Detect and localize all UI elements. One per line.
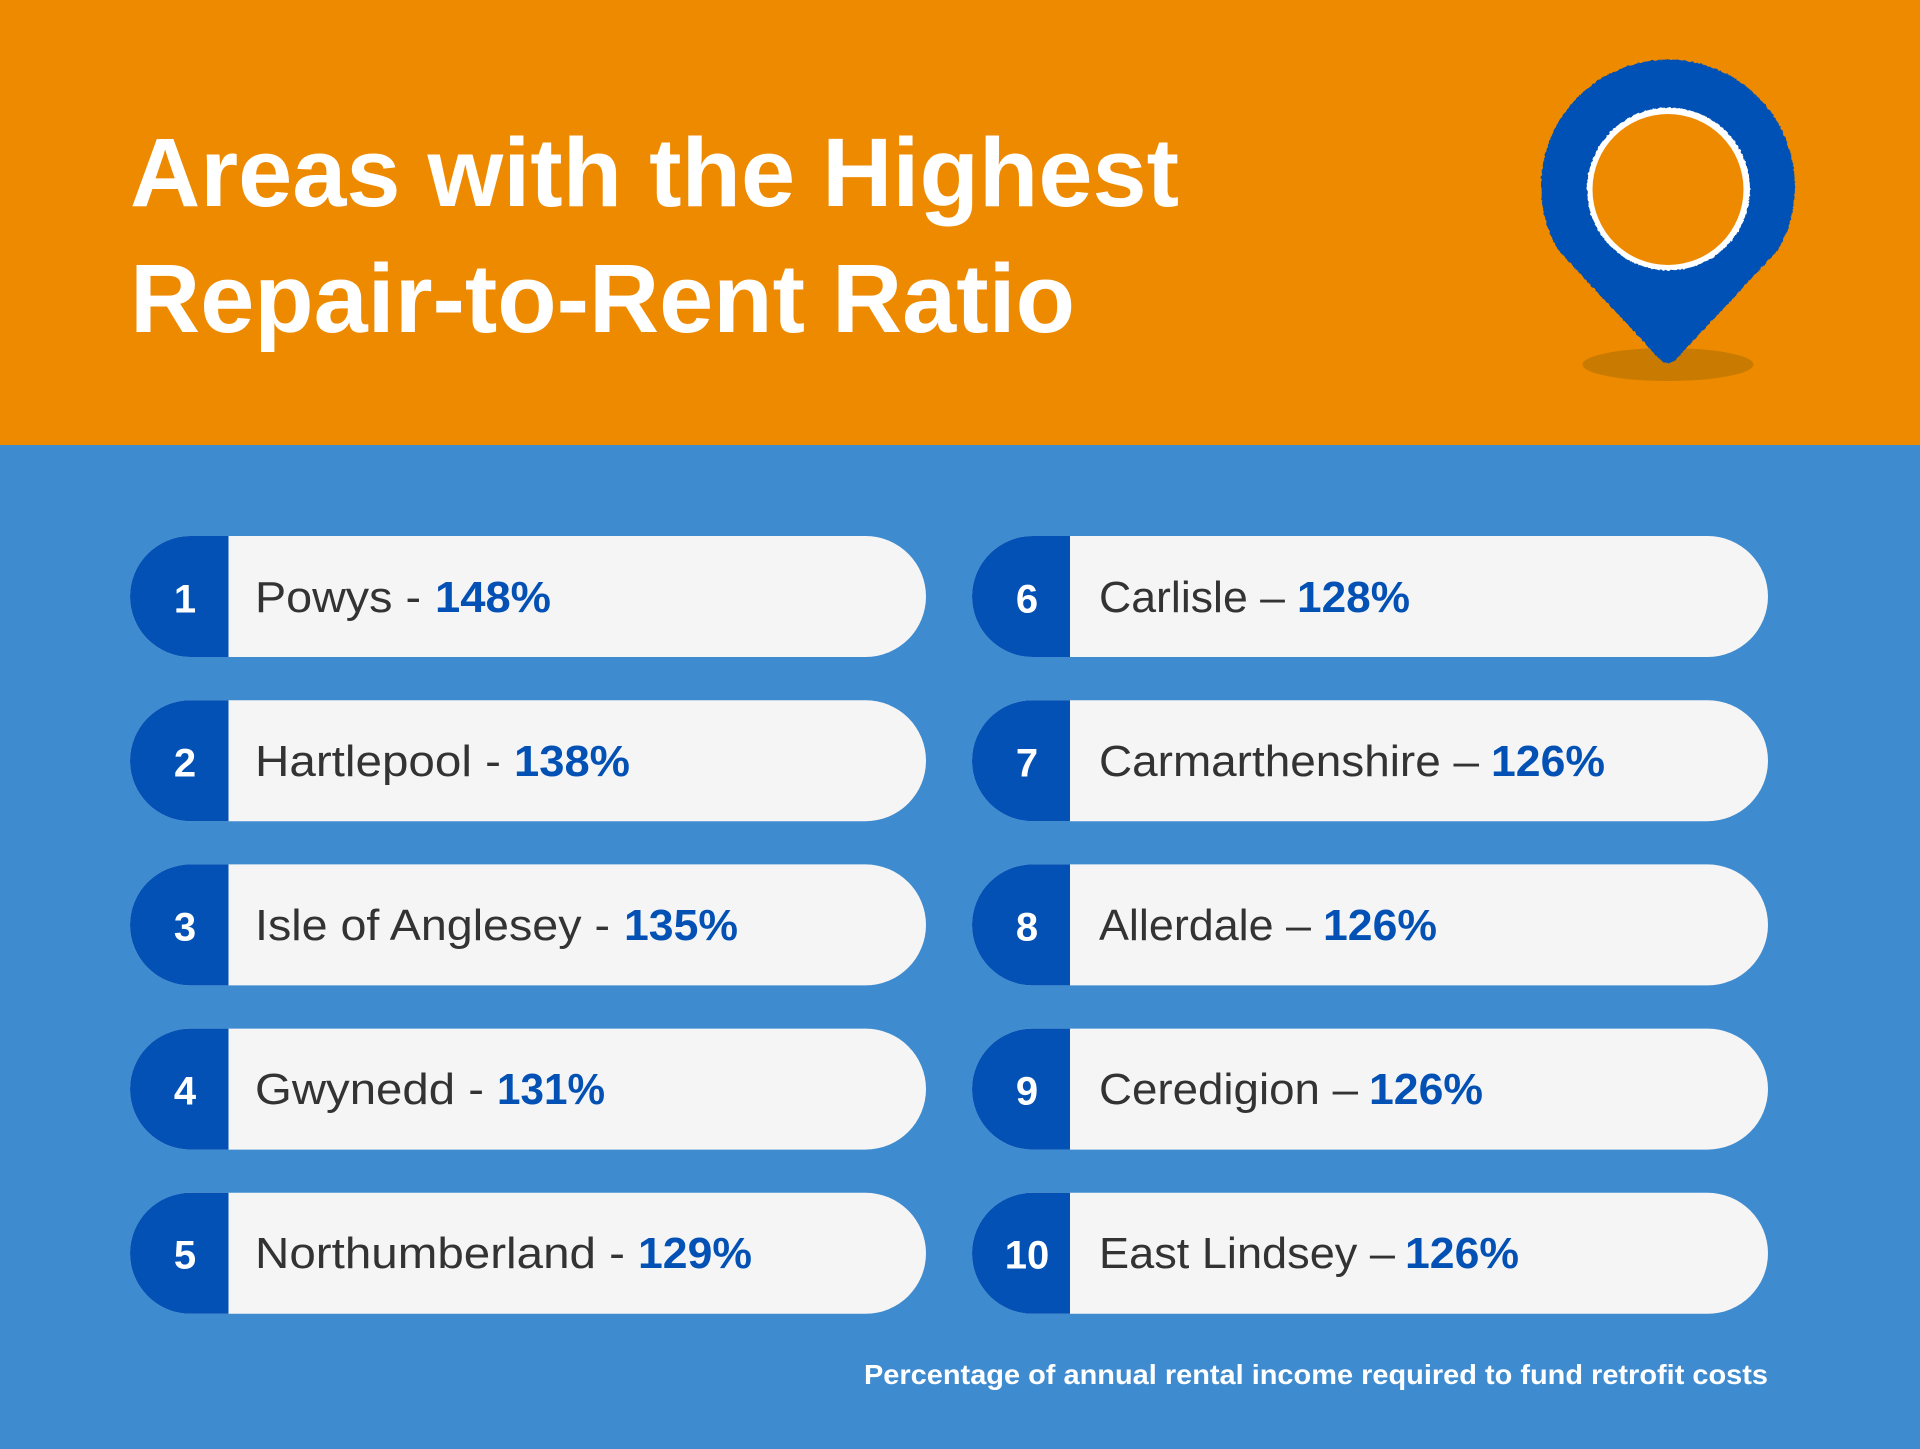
row 3: Isle of Anglesey: 3 [174, 906, 196, 950]
row 1: Powys [130, 536, 926, 657]
row 1: Powys: 1 [174, 578, 196, 622]
row 6: Carlisle: 128% [1297, 573, 1410, 622]
row 4: Gwynedd: Gwynedd - [255, 1065, 484, 1114]
row 10: East Lindsey: East Lindsey – [1099, 1229, 1396, 1278]
row 9: Ceredigion: 126% [1369, 1065, 1483, 1114]
row 2: Hartlepool: Hartlepool - [255, 737, 501, 786]
row 10: East Lindsey: 126% [1405, 1229, 1519, 1278]
title: Areas with the Highest [130, 118, 1179, 227]
row 10: East Lindsey: 10 [1005, 1234, 1049, 1278]
row 6: Carlisle [972, 536, 1768, 657]
row 4: Gwynedd: 4 [174, 1070, 197, 1114]
panel: header band [0, 0, 1920, 445]
row 3: Isle of Anglesey: Isle of Anglesey - [255, 901, 610, 950]
row 5: Northumberland [130, 1193, 926, 1314]
row 9: Ceredigion: Ceredigion – [1099, 1065, 1359, 1114]
row 7: Carmarthenshire: 7 [1016, 742, 1038, 786]
row 2: Hartlepool [130, 700, 926, 821]
row 6: Carlisle: 6 [1016, 578, 1038, 622]
row 5: Northumberland: 5 [174, 1234, 196, 1278]
row 6: Carlisle: Carlisle – [1099, 573, 1286, 622]
footnote: Percentage of annual rental income required to fund retrofit costs [864, 1359, 1768, 1390]
row 8: Allerdale: 8 [1016, 906, 1038, 950]
row 9: Ceredigion: 9 [1016, 1070, 1038, 1114]
icon: location pin [1541, 60, 1795, 381]
row 9: Ceredigion [972, 1029, 1768, 1150]
panel: list background [0, 444, 1920, 1449]
row 3: Isle of Anglesey: 135% [624, 901, 738, 950]
row 5: Northumberland: 129% [638, 1229, 752, 1278]
row 8: Allerdale: 126% [1323, 901, 1437, 950]
row 7: Carmarthenshire: 126% [1491, 737, 1605, 786]
row 4: Gwynedd: 131% [497, 1065, 605, 1114]
row 10: East Lindsey [972, 1193, 1768, 1314]
row 8: Allerdale: Allerdale – [1099, 901, 1312, 950]
row 2: Hartlepool: 2 [174, 742, 196, 786]
row 5: Northumberland: Northumberland - [255, 1229, 625, 1278]
row 1: Powys: Powys - [255, 573, 421, 622]
row 4: Gwynedd [130, 1029, 926, 1150]
title [130, 118, 1179, 353]
row 3: Isle of Anglesey [130, 864, 926, 985]
title: Repair-to-Rent Ratio [130, 244, 1075, 353]
row 2: Hartlepool: 138% [514, 737, 630, 786]
row 1: Powys: 148% [435, 573, 551, 622]
row 8: Allerdale [972, 864, 1768, 985]
row 7: Carmarthenshire [972, 700, 1768, 821]
row 7: Carmarthenshire: Carmarthenshire – [1099, 737, 1480, 786]
